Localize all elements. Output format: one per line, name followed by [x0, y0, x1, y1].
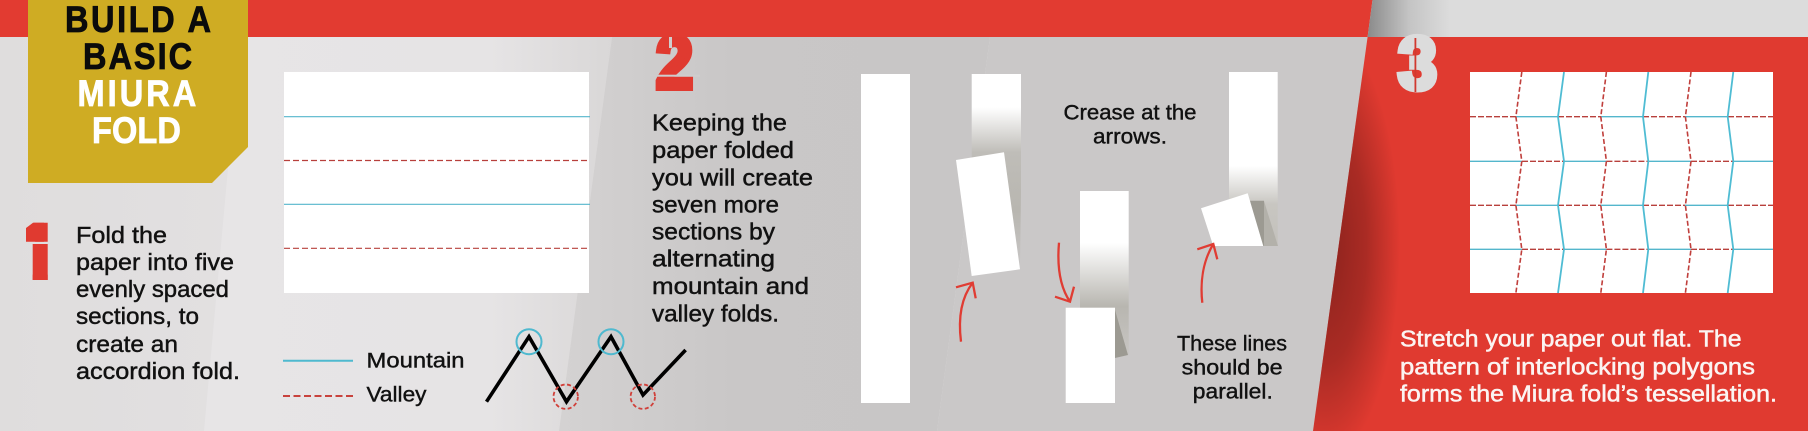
- step 2 instructions: [652, 110, 813, 327]
- step 2 instructions: mountain and: [652, 273, 809, 299]
- note: crease at the arrows: arrows.: [1093, 125, 1167, 148]
- note: lines should be parallel: should be: [1182, 357, 1283, 380]
- paper strip: unfolded: [861, 74, 910, 403]
- step 2 instructions: paper folded: [652, 137, 794, 163]
- step 1 instructions: [76, 222, 240, 384]
- title badge: FOLD: [92, 110, 181, 151]
- step 1 instructions: create an: [76, 331, 178, 357]
- top red band: [0, 0, 1372, 37]
- title badge: [28, 0, 248, 183]
- arrow: second fold: [1055, 243, 1074, 302]
- note: crease at the arrows: Crease at the: [1064, 101, 1196, 124]
- step 3 numeral: 3: [1398, 22, 1437, 104]
- step 2 numeral: 2: [656, 21, 693, 104]
- vertical mountain creases: [1558, 72, 1733, 293]
- legend: mountain and valley: Mountain: [366, 350, 464, 372]
- panel: step 3 red background: [1313, 37, 1808, 431]
- title badge: BUILD A: [65, 0, 211, 40]
- paper strip: second fold: [1066, 191, 1129, 403]
- step 2 instructions: alternating: [652, 246, 775, 272]
- step 2 instructions: Keeping the: [652, 110, 787, 136]
- step 2 instructions: seven more: [652, 192, 779, 218]
- title badge: MIURA: [78, 73, 196, 114]
- note: lines should be parallel: These lines: [1177, 333, 1287, 356]
- paper strip: first fold: [956, 74, 1021, 276]
- step 3 instructions: pattern of interlocking polygons: [1400, 354, 1755, 380]
- legend: mountain and valley: [283, 350, 464, 406]
- step 3 instructions: [1400, 326, 1777, 407]
- title badge: BASIC: [83, 36, 192, 77]
- diagram: paper with five sections: [284, 72, 590, 293]
- arrow: first fold: [956, 283, 976, 342]
- top right grey band: [1368, 0, 1808, 37]
- step 3 instructions: forms the Miura fold’s tessellation.: [1400, 381, 1777, 407]
- step 1 instructions: evenly spaced: [76, 276, 229, 302]
- horizontal creases: [1470, 117, 1773, 249]
- note: crease at the arrows: [1064, 101, 1196, 148]
- note: lines should be parallel: parallel.: [1193, 381, 1273, 404]
- diagram: finished Miura fold crease pattern: [1470, 72, 1773, 293]
- step 2 instructions: valley folds.: [652, 301, 779, 327]
- step 3 instructions: Stretch your paper out flat. The: [1400, 326, 1742, 352]
- step 1 instructions: paper into five: [76, 249, 234, 275]
- legend: mountain and valley: Valley: [366, 384, 427, 406]
- step 1 instructions: Fold the: [76, 222, 167, 248]
- step 1 instructions: sections, to: [76, 303, 199, 329]
- step 1 instructions: accordion fold.: [76, 358, 240, 384]
- note: lines should be parallel: [1177, 333, 1287, 404]
- diagram: accordion fold zigzag: [486, 329, 686, 409]
- step 2 instructions: sections by: [652, 218, 775, 244]
- step 2 instructions: you will create: [652, 164, 813, 190]
- step 1 numeral: 1: [20, 202, 56, 304]
- vertical valley creases: [1516, 72, 1691, 293]
- arrow: third fold: [1197, 244, 1217, 303]
- paper strip: third fold: [1201, 72, 1278, 246]
